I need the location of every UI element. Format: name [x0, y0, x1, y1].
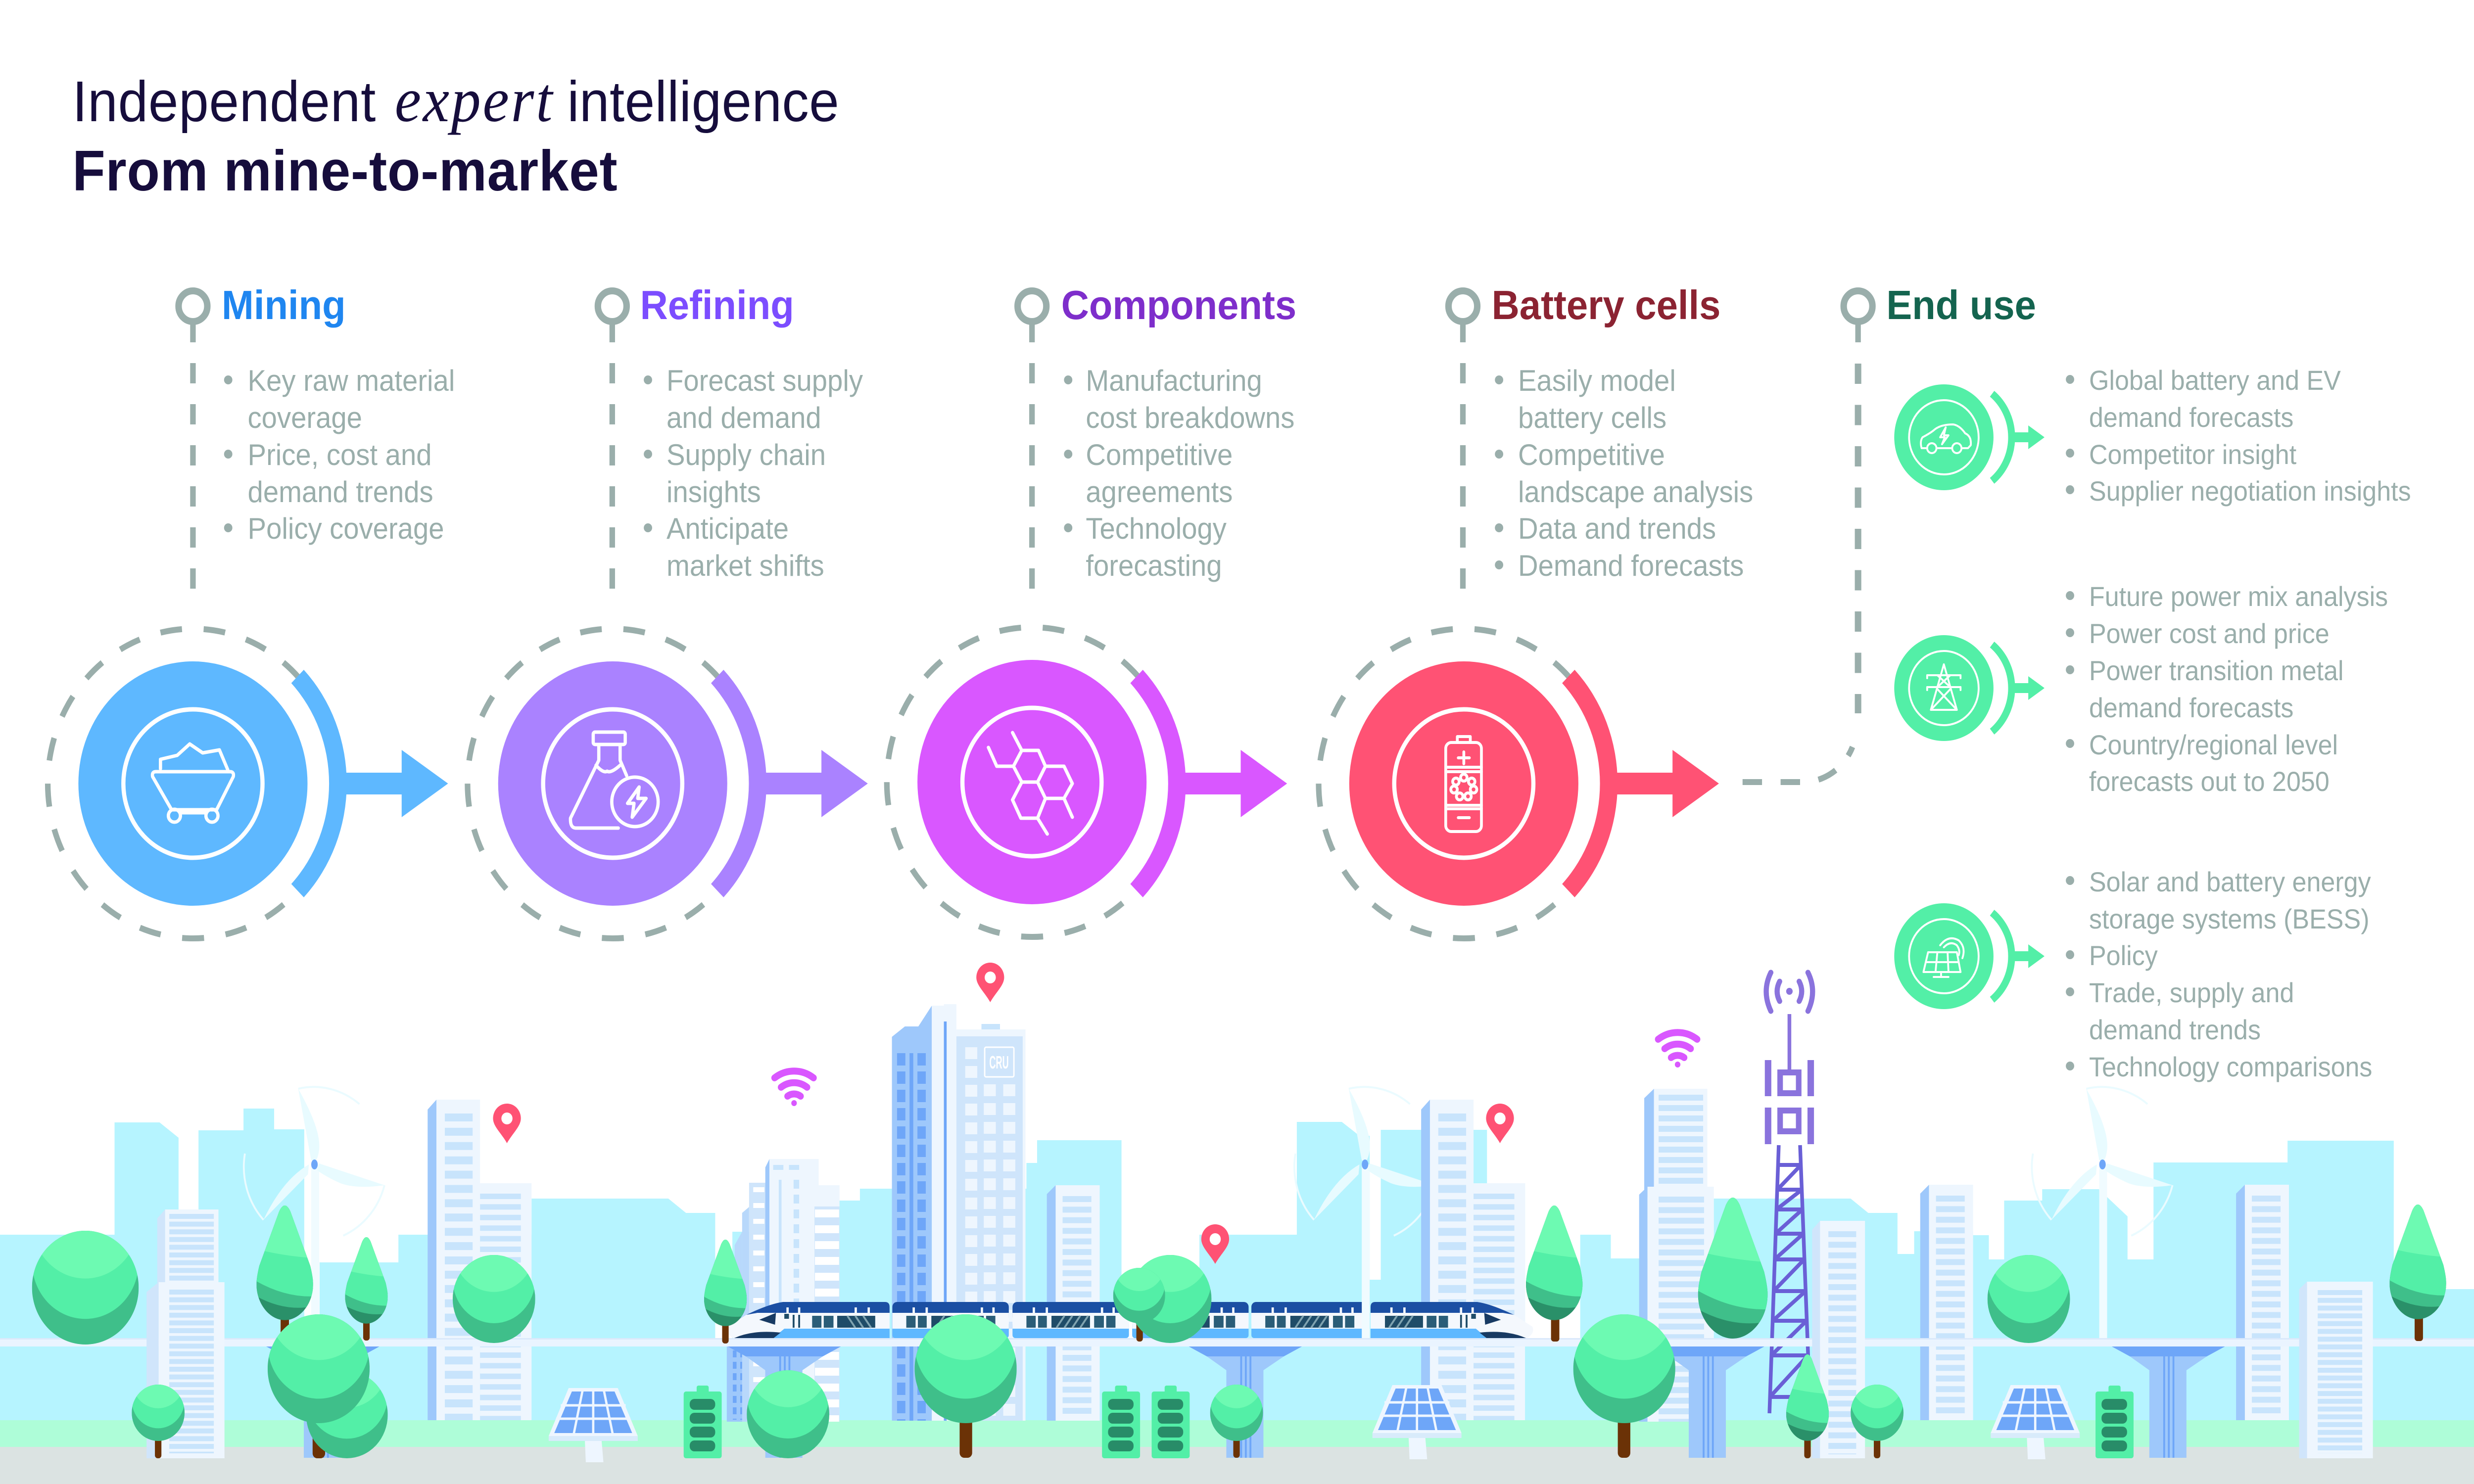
city skyline scene	[0, 963, 2474, 1484]
battery	[1152, 1386, 1189, 1458]
pillar	[2112, 1346, 2225, 1458]
text: power bullets: forecasts out to 2050	[2089, 766, 2330, 797]
title: expert	[395, 64, 554, 135]
battery	[684, 1386, 722, 1458]
location pin	[493, 1104, 521, 1143]
text: power bullets: demand forecasts	[2089, 693, 2293, 723]
bullet list: Mining	[224, 364, 455, 545]
bullet list: Refining: insights	[666, 475, 761, 509]
trees	[32, 1165, 2452, 1458]
bullet list: Mining: coverage	[248, 401, 362, 434]
text: EV bullets: Competitor insight	[2089, 439, 2296, 470]
green ground band	[0, 1420, 2474, 1447]
heading: End use: End use	[1886, 282, 2036, 328]
building: tower behind mast	[1639, 1089, 1714, 1422]
text: EV bullets	[2066, 365, 2411, 507]
text: power bullets: Future power mix analysis	[2089, 581, 2388, 612]
wind turbine	[1294, 1087, 1435, 1343]
icon: flask with lightning	[571, 732, 658, 828]
elevated rail track	[0, 1338, 2474, 1346]
heading: Refining: Refining	[640, 282, 794, 328]
bullet list: Battery cells	[1495, 364, 1753, 582]
solar panel	[1373, 1385, 1462, 1459]
bullet list: Mining: Price, cost and	[248, 438, 432, 471]
bullet list: Refining: market shifts	[666, 549, 824, 582]
wind turbine	[244, 1087, 384, 1343]
wifi signal	[1658, 1032, 1697, 1067]
text: power bullets: Country/regional level	[2089, 730, 2338, 760]
bullet list: Refining: Forecast supply	[666, 364, 863, 397]
bullet list: Mining: Key raw material	[248, 364, 455, 397]
bullet list: Battery cells: Competitive	[1518, 438, 1665, 471]
bullet list: Battery cells: Data and trends	[1518, 512, 1716, 545]
bullet list: Components: Manufacturing	[1086, 364, 1262, 397]
heading: Components: Components	[1061, 282, 1296, 328]
bullet list: Components: agreements	[1086, 475, 1233, 509]
end use item: EV	[1894, 365, 2411, 507]
heading: Mining: Mining	[222, 282, 346, 328]
title: Independent	[72, 69, 376, 134]
timeline marker: Refining	[598, 291, 626, 590]
bullet list: Mining: Policy coverage	[248, 512, 444, 545]
title: intelligence	[567, 69, 839, 134]
panel: Components column	[887, 282, 1296, 937]
bullet list: Battery cells: battery cells	[1518, 401, 1666, 434]
text: power bullets	[2066, 581, 2388, 797]
bullet list: Components	[1064, 364, 1294, 582]
building: front centre right	[1812, 1221, 1865, 1458]
building: left tower back	[157, 1209, 219, 1289]
location pin	[976, 963, 1004, 1002]
text: power bullets: Power transition metal	[2089, 655, 2344, 686]
text: solar bullets	[2066, 867, 2372, 1082]
panel: Refining column	[468, 282, 868, 938]
panel: Mining column	[48, 282, 455, 938]
bullet list: Components: cost breakdowns	[1086, 401, 1294, 434]
icon: molecule	[989, 733, 1072, 834]
text: EV bullets: demand forecasts	[2089, 402, 2293, 433]
stage circle: Mining	[48, 629, 448, 938]
bullet list: Refining	[644, 364, 863, 582]
icon: mine cart	[152, 744, 234, 822]
timeline marker: Mining	[179, 291, 207, 590]
CRU sign: CRU	[989, 1053, 1009, 1072]
building: downtown cluster	[727, 1159, 840, 1422]
battery	[2095, 1386, 2134, 1458]
bullet list: Battery cells: Demand forecasts	[1518, 549, 1744, 582]
timeline marker: End use	[1844, 291, 1872, 713]
bullet list: Refining: Anticipate	[666, 512, 789, 545]
building: low tower	[1920, 1185, 1973, 1420]
heading: Battery cells: Battery cells	[1492, 282, 1720, 328]
stage circle: Components	[887, 627, 1287, 937]
building: low tower centre	[1047, 1185, 1100, 1421]
pillar	[1651, 1346, 1764, 1458]
wifi signal	[774, 1071, 813, 1106]
building: front left	[146, 1282, 225, 1458]
text: EV bullets: Global battery and EV	[2089, 365, 2341, 396]
telecom mast	[1765, 973, 1814, 1413]
end use item: solar and storage	[1894, 867, 2372, 1082]
title	[72, 64, 839, 203]
CRU sign	[985, 1047, 1014, 1077]
solar panel	[1991, 1385, 2080, 1459]
text: power bullets: Power cost and price	[2089, 618, 2330, 649]
end use item: power	[1894, 581, 2388, 797]
wind turbine	[2032, 1087, 2173, 1343]
text: solar bullets: Solar and battery energy	[2089, 867, 2371, 897]
icon: battery cell	[1446, 737, 1481, 832]
battery	[1102, 1386, 1140, 1458]
connector: battery cells to end use	[1743, 747, 1853, 782]
bullet list: Refining: Supply chain	[666, 438, 826, 471]
icon: solar panel	[1894, 903, 1994, 1009]
building: CRU tower	[892, 1004, 1026, 1421]
building: low tower	[2236, 1185, 2289, 1420]
location pin	[1201, 1224, 1229, 1264]
text: solar bullets: storage systems (BESS)	[2089, 904, 2370, 934]
text: solar bullets: Policy	[2089, 940, 2158, 971]
panel: Battery cells column	[1319, 282, 1753, 938]
text: solar bullets: Technology comparisons	[2089, 1052, 2372, 1082]
location pin	[1486, 1104, 1514, 1143]
text: solar bullets: demand trends	[2089, 1015, 2261, 1045]
timeline marker: Battery cells	[1448, 291, 1477, 590]
pillar	[1189, 1346, 1302, 1458]
text: solar bullets: Trade, supply and	[2089, 977, 2294, 1008]
train	[727, 1298, 1533, 1338]
bullet list: Battery cells: Easily model	[1518, 364, 1676, 397]
pillar	[266, 1346, 380, 1458]
skyline silhouette	[0, 1109, 2474, 1420]
bullet list: Components: Competitive	[1086, 438, 1233, 471]
pillar	[728, 1346, 841, 1458]
stage circle: Refining	[468, 629, 868, 938]
bullet list: Mining: demand trends	[248, 475, 433, 509]
timeline marker: Components	[1018, 291, 1047, 590]
bullet list: Refining: and demand	[666, 401, 821, 434]
building: twin towers left	[428, 1100, 531, 1420]
road	[0, 1447, 2474, 1484]
building: twin towers centre	[1421, 1100, 1525, 1420]
text: EV bullets: Supplier negotiation insights	[2089, 476, 2411, 507]
icon: electric car	[1894, 384, 1994, 490]
bullet list: Components: forecasting	[1086, 549, 1222, 582]
stage circle: Battery cells	[1319, 629, 1719, 938]
building: front right	[2299, 1282, 2373, 1458]
icon: pylon	[1894, 635, 1994, 741]
title: From mine-to-market	[72, 139, 618, 203]
bullet list: Components: Technology	[1086, 512, 1227, 545]
bullet list: Battery cells: landscape analysis	[1518, 475, 1753, 509]
solar panel	[549, 1388, 638, 1462]
panel: End use column	[1844, 282, 2411, 1082]
